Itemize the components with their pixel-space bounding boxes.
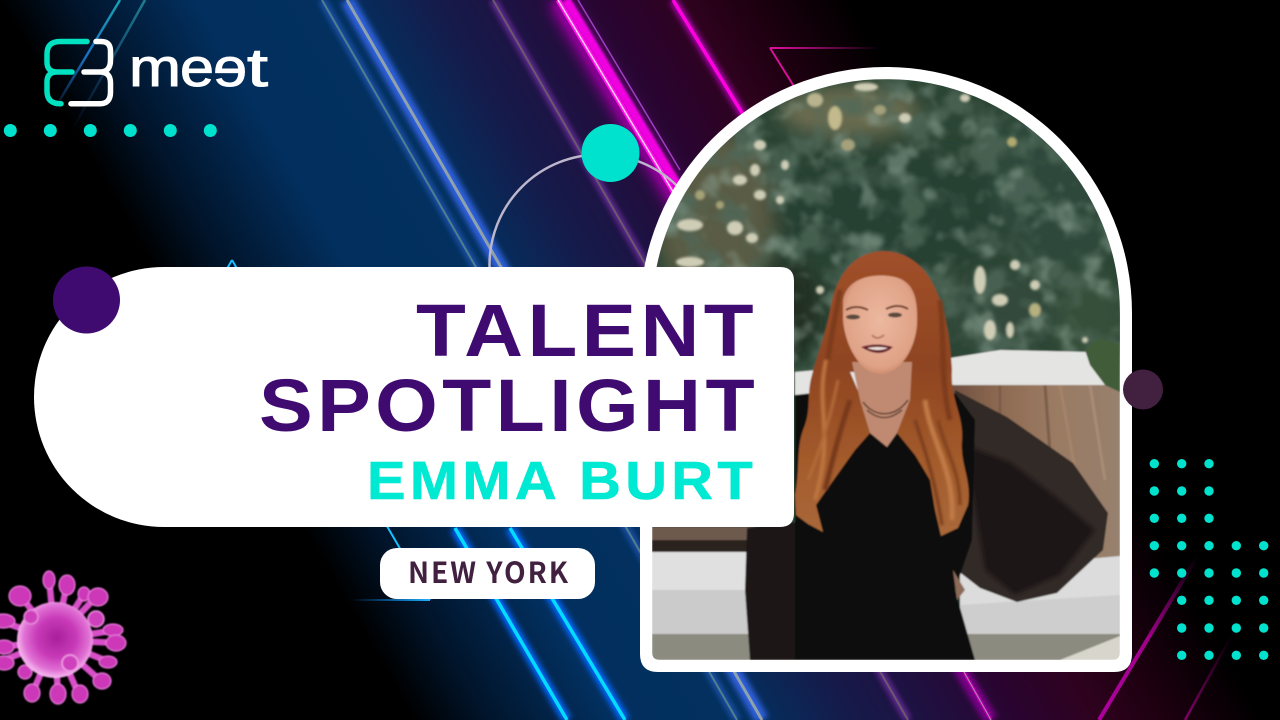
triangle outline: cyan — [224, 260, 430, 600]
title card — [34, 267, 794, 527]
wordmark: e — [213, 38, 247, 98]
dark plum accent circle — [1123, 370, 1163, 410]
wooden fence — [950, 385, 1120, 580]
triangle outline: magenta — [770, 48, 880, 88]
dress — [795, 390, 975, 660]
white lower wall — [652, 550, 748, 591]
wordmark: e — [180, 38, 214, 98]
neck and chest — [852, 362, 912, 447]
face — [843, 276, 917, 374]
heading: talent: TALENT — [416, 289, 758, 372]
wordmark: t — [247, 38, 268, 98]
purple accent circle — [53, 266, 120, 334]
hair — [795, 251, 969, 536]
leaves over wall — [1085, 338, 1120, 392]
white arch frame — [640, 67, 1132, 672]
photo frame — [640, 67, 1132, 672]
white wall top band — [795, 350, 1120, 395]
left sleeve — [744, 522, 796, 660]
foliage — [655, 86, 1130, 370]
right sleeve — [953, 390, 1108, 602]
wordmark — [129, 38, 268, 98]
name: EMMA BURT — [367, 451, 757, 511]
location pill — [380, 548, 595, 599]
facial features — [846, 306, 908, 353]
portrait photo — [652, 79, 1130, 660]
dot row top left — [4, 124, 217, 137]
logo — [47, 38, 268, 104]
wordmark: m — [129, 38, 181, 98]
heading: spotlight: SPOTLIGHT — [259, 364, 759, 447]
teal accent circle — [582, 124, 640, 182]
hand on hip — [953, 570, 965, 600]
thin circular arc — [490, 154, 710, 376]
location label: NEW YORK — [408, 550, 570, 592]
white rounded panel — [34, 267, 794, 527]
dot grid bottom right — [1150, 459, 1268, 660]
ground — [652, 634, 1120, 660]
left wooden section — [652, 527, 754, 541]
icon: virus — [0, 571, 126, 704]
icon: logo mark — [47, 42, 110, 104]
